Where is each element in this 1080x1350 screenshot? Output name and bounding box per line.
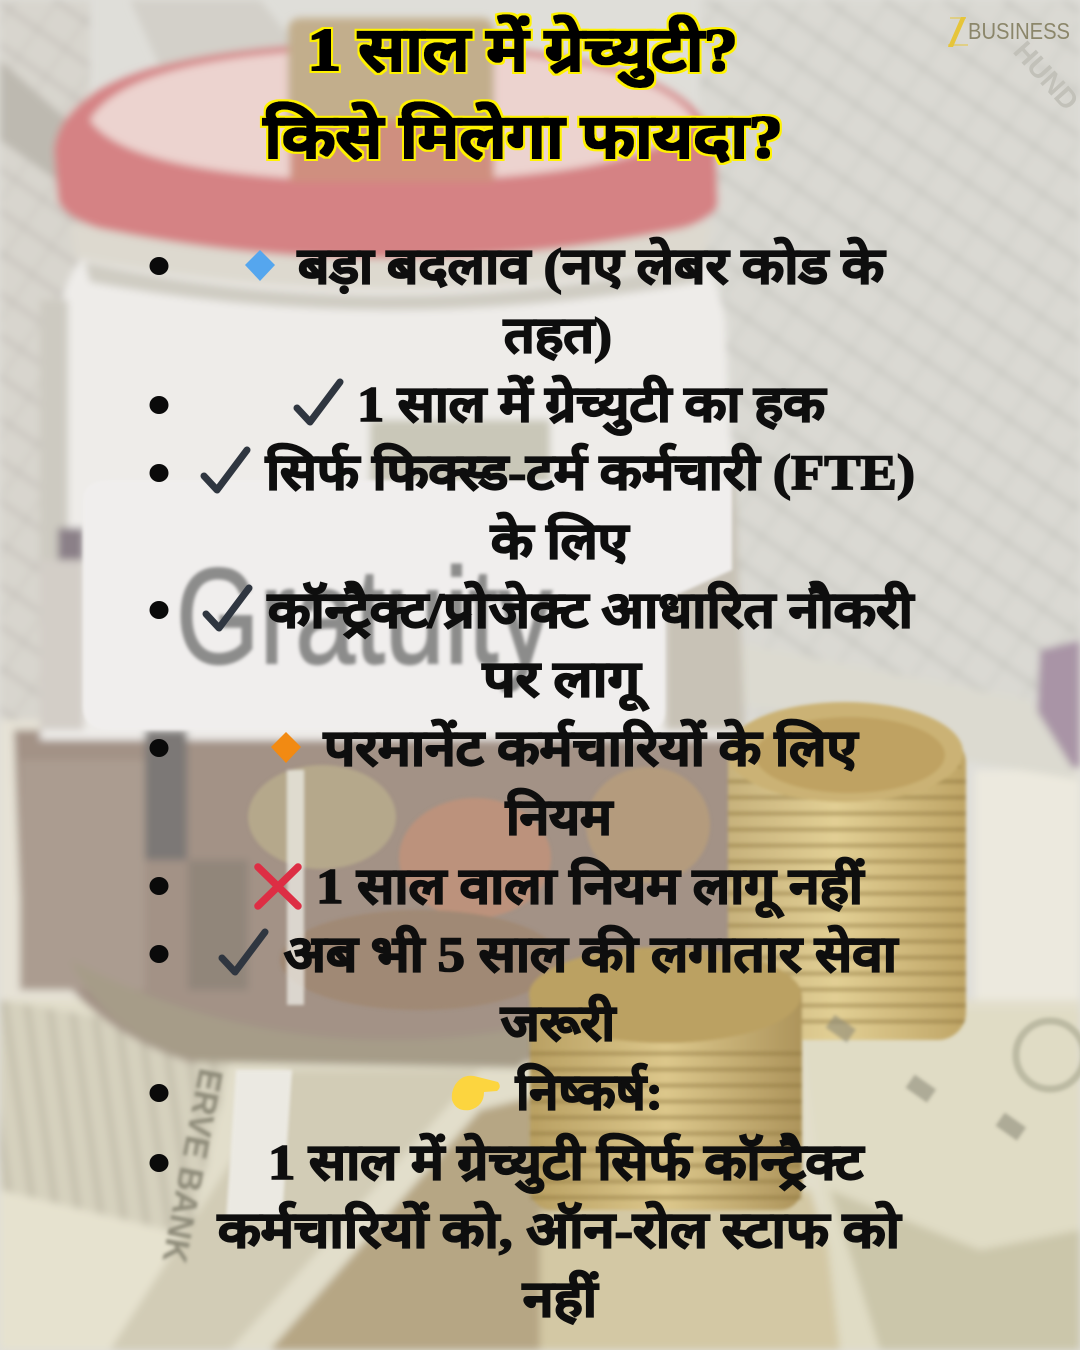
list item: big change heading: तहत)	[503, 307, 612, 363]
coin stack right	[728, 735, 966, 1040]
coin stack centre	[530, 975, 802, 1210]
title: 1 साल में ग्रेच्युटी?	[307, 15, 738, 88]
list item: contract jobs: कॉन्ट्रैक्ट/प्रोजेक्ट आधारित नौकरी	[267, 581, 915, 639]
list item: conclusion text	[217, 1133, 902, 1327]
notes top and sides	[700, 0, 1080, 720]
list item: fixed-term employees: सिर्फ फिक्स्ड-टर्म कर्मचारी (FTE)	[265, 443, 915, 500]
list item: conclusion text: कर्मचारियों को, ऑन-रोल स्टाफ को	[217, 1201, 902, 1258]
jar upper body	[40, 235, 745, 740]
list item: permanent employees heading: परमानेंट कर्मचारियों के लिए	[323, 719, 860, 776]
list item: permanent employees heading: नियम	[505, 788, 614, 845]
list item: conclusion text: 1 साल में ग्रेच्युटी सिर्फ कॉन्ट्रैक्ट	[268, 1133, 865, 1194]
icon: pointing hand	[452, 1076, 500, 1110]
list item: contract jobs: पर लागू	[482, 651, 649, 711]
icon: red cross	[258, 867, 298, 906]
list item: conclusion: निष्कर्ष:	[515, 1063, 663, 1120]
icon: check	[204, 450, 247, 490]
list item: one year rule not applicable: 1 साल वाला नियम लागू नहीं	[316, 857, 865, 918]
list item: fixed-term employees	[204, 443, 915, 569]
logo: Z Business	[948, 17, 1070, 47]
list item: conclusion	[452, 1063, 663, 1120]
list item: permanent employees heading	[271, 719, 860, 845]
note marks	[826, 1015, 1026, 1141]
note lettering: ERVE BANK	[154, 1065, 229, 1267]
coins in jar	[248, 765, 396, 869]
title	[263, 15, 783, 170]
list item: five years service: अब भी 5 साल की लगातार सेवा	[284, 925, 899, 982]
lid	[54, 42, 718, 262]
list bullets	[150, 257, 168, 1172]
jar label word: Gratuity	[176, 540, 552, 692]
icon: check	[297, 382, 340, 422]
list item: contract jobs	[206, 581, 915, 711]
list item: big change heading: बड़ा बदलाव (नए लेबर कोड के	[297, 237, 886, 294]
jar coins base	[145, 730, 187, 860]
title: किसे मिलेगा फायदा?	[263, 102, 783, 170]
bottom notes	[0, 1000, 1080, 1350]
list item: five years service	[222, 925, 899, 1051]
icon: orange diamond	[271, 732, 301, 763]
list item: big change heading	[245, 237, 886, 363]
list item: five years service: जरूरी	[500, 994, 617, 1051]
jar lower body	[14, 730, 760, 1062]
list item: conclusion text: नहीं	[522, 1270, 599, 1327]
white strip on note	[226, 1070, 292, 1220]
gratuity label	[83, 480, 732, 730]
icon: blue diamond	[245, 250, 275, 281]
icon: check	[206, 588, 249, 628]
list item: fixed-term employees: के लिए	[490, 512, 631, 569]
list item: one year gratuity right: 1 साल में ग्रेच्युटी का हक	[357, 375, 827, 436]
icon: check	[222, 932, 265, 972]
